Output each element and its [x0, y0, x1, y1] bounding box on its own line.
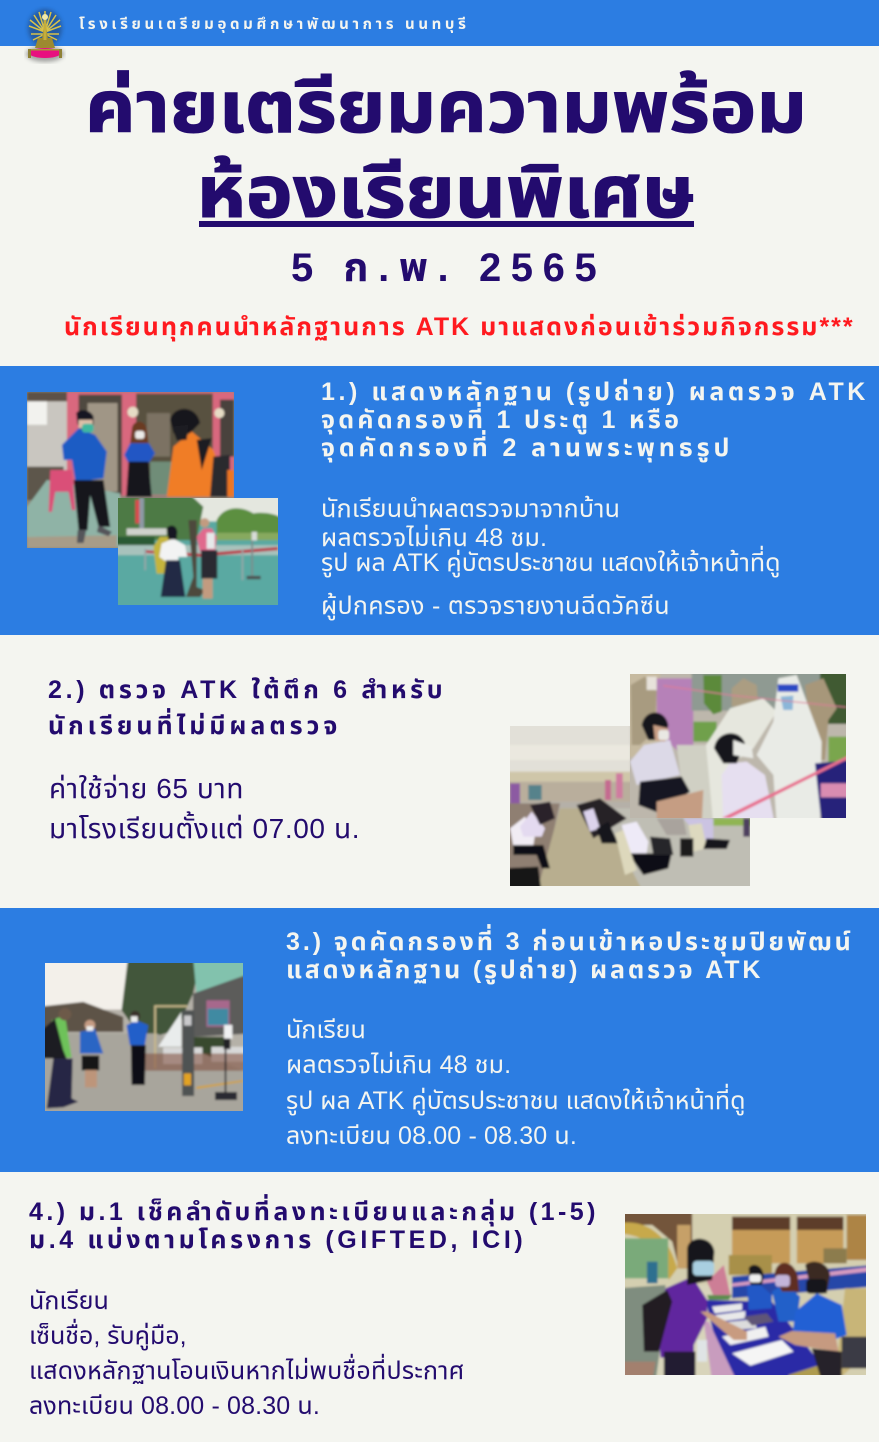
panel: step 3	[0, 908, 879, 1172]
heading line 1: 1.) แสดงหลักฐาน (รูปถ่าย) ผลตรวจ ATK	[321, 378, 869, 406]
photo: nasal swab ATK test	[630, 674, 846, 818]
photo: registration desk	[625, 1214, 866, 1375]
detail line 4: ลงทะเบียน 08.00 - 08.30 น.	[29, 1392, 320, 1420]
step 4 details	[29, 1287, 465, 1420]
detail line 2: เซ็นชื่อ, รับคู่มือ,	[29, 1322, 187, 1350]
panel: step 1	[0, 366, 879, 635]
icon: school emblem	[24, 7, 66, 64]
detail line 3: รูป ผล ATK คู่บัตรประชาชน แสดงให้เจ้าหน้าที่ดู	[286, 1087, 746, 1115]
photo: student at temperature checkpoint	[118, 498, 278, 605]
detail line 4: ลงทะเบียน 08.00 - 08.30 น.	[286, 1122, 577, 1150]
step 2 heading	[48, 676, 446, 740]
photo: checkpoint with staff	[45, 963, 243, 1111]
step 2 details	[49, 773, 360, 844]
detail line 2: มาโรงเรียนตั้งแต่ 07.00 น.	[49, 813, 360, 844]
heading line 1: 2.) ตรวจ ATK ใต้ตึก 6 สำหรับ	[48, 676, 446, 704]
detail line 1: นักเรียน	[286, 1016, 366, 1044]
detail line 2: ผลตรวจไม่เกิน 48 ชม.	[321, 524, 547, 552]
step 3 heading	[286, 924, 854, 984]
photo: students seated in hall	[510, 726, 750, 886]
step 3 details	[286, 1016, 746, 1150]
date: 5 ก.พ. 2565	[291, 246, 606, 290]
school name: โรงเรียนเตรียมอุดมศึกษาพัฒนาการ นนทบุรี	[79, 16, 469, 33]
heading line 2: ม.4 แบ่งตามโครงการ (GIFTED, ICI)	[29, 1226, 526, 1254]
detail line 4: ผู้ปกครอง - ตรวจรายงานฉีดวัคซีน	[321, 592, 670, 620]
heading line 3: จุดคัดกรองที่ 2 ลานพระพุทธรูป	[321, 434, 733, 462]
detail line 1: นักเรียนนำผลตรวจมาจากบ้าน	[321, 495, 620, 523]
detail line 3: รูป ผล ATK คู่บัตรประชาชน แสดงให้เจ้าหน้าที่ดู	[321, 549, 780, 577]
heading line 1: 4.) ม.1 เช็คลำดับที่ลงทะเบียนและกลุ่ม (1-5)	[29, 1198, 599, 1226]
detail line 2: ผลตรวจไม่เกิน 48 ชม.	[286, 1051, 511, 1079]
heading line 2: นักเรียนที่ไม่มีผลตรวจ	[48, 712, 341, 740]
title line 2: ห้องเรียนพิเศษ	[196, 153, 696, 233]
detail line 1: นักเรียน	[29, 1287, 109, 1315]
step 1 heading	[321, 378, 869, 462]
heading line 1: 3.) จุดคัดกรองที่ 3 ก่อนเข้าหอประชุมปิยพัฒน์	[286, 928, 854, 956]
detail line 3: แสดงหลักฐานโอนเงินหากไม่พบชื่อที่ประกาศ	[29, 1357, 465, 1385]
step 4 heading	[29, 1194, 599, 1254]
title	[85, 68, 807, 233]
heading line 2: แสดงหลักฐาน (รูปถ่าย) ผลตรวจ ATK	[286, 956, 763, 984]
photo: students and staff at pink building	[27, 392, 234, 548]
step 1 details	[321, 495, 780, 620]
title line 1: ค่ายเตรียมความพร้อม	[85, 68, 807, 148]
detail line 1: ค่าใช้จ่าย 65 บาท	[49, 773, 244, 804]
red notice: นักเรียนทุกคนนำหลักฐานการ ATK มาแสดงก่อนเข้าร่วมกิจกรรม***	[64, 313, 855, 341]
heading line 2: จุดคัดกรองที่ 1 ประตู 1 หรือ	[321, 406, 682, 434]
header bar	[0, 0, 879, 46]
